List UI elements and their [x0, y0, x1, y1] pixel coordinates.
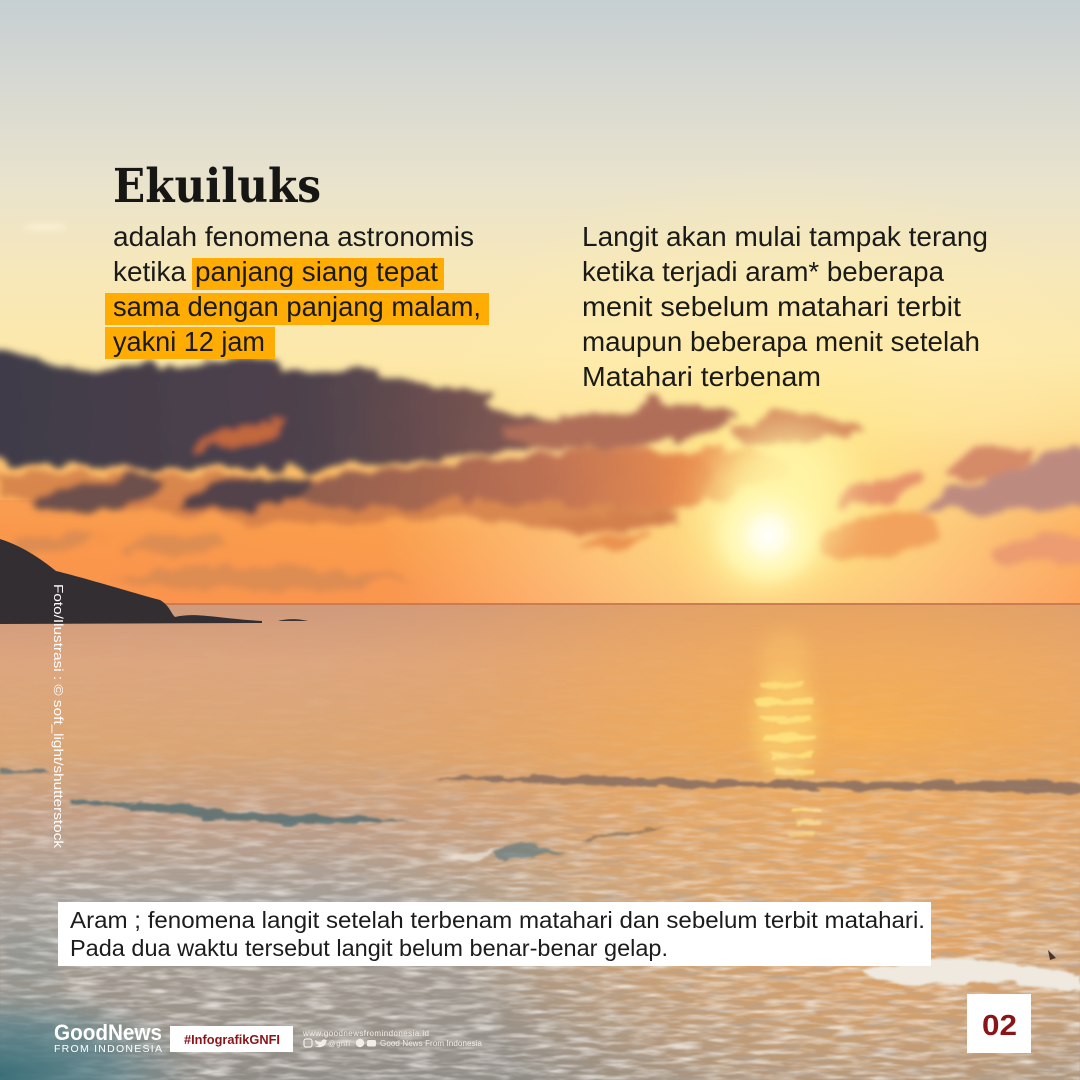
text block: definition	[113, 221, 481, 357]
text block: definition: adalah fenomena astronomis	[113, 221, 474, 252]
page number	[967, 994, 1031, 1053]
icon: twitter	[315, 1039, 327, 1047]
text block: aram explanation: maupun beberapa menit setelah	[582, 326, 980, 357]
text block: definition: ketika	[113, 256, 187, 287]
photo credit: Foto/Ilustrasi : © soft_light/shutterstock	[51, 584, 65, 849]
background photo: sun glow	[683, 407, 867, 613]
hashtag badge	[170, 1026, 293, 1052]
social links: www.goodnewsfromindonesia.id	[302, 1029, 429, 1038]
callout: aram definition	[58, 902, 931, 966]
social links: @gnfi	[328, 1039, 350, 1048]
text block: definition: yakni 12 jam	[113, 326, 265, 357]
background photo: clouds	[0, 350, 1080, 590]
background photo: sunset sky	[0, 0, 1080, 606]
text block: aram explanation: ketika terjadi aram* beberapa	[582, 256, 945, 287]
logo: GoodNews From Indonesia: FROM INDONESIA	[54, 1043, 162, 1055]
text block: aram explanation: Matahari terbenam	[582, 361, 821, 392]
icon: facebook	[356, 1039, 364, 1047]
callout: aram definition: Pada dua waktu tersebut langit belum benar-benar gelap.	[70, 935, 668, 961]
title: Ekuiluks	[113, 159, 321, 214]
text block: definition: panjang siang tepat	[195, 256, 438, 287]
callout: aram definition: Aram ; fenomena langit setelah terbenam matahari dan sebelum terbit matahari.	[70, 907, 925, 933]
text block: aram explanation: menit sebelum matahari terbit	[582, 291, 961, 322]
social links	[302, 1029, 483, 1048]
background photo: headland silhouette	[0, 539, 308, 624]
logo: GoodNews From Indonesia	[54, 1020, 162, 1055]
text block: aram explanation: Langit akan mulai tampak terang	[582, 221, 988, 252]
text block: definition: sama dengan panjang malam,	[113, 291, 481, 322]
icon: youtube	[367, 1040, 376, 1046]
background photo: sea	[0, 603, 1080, 1080]
icon: instagram	[304, 1039, 312, 1047]
social links: Good News From Indonesia	[380, 1039, 483, 1048]
hashtag badge: #InfografikGNFI	[184, 1032, 280, 1047]
text block: aram explanation	[582, 221, 988, 392]
highlight bars	[105, 258, 489, 359]
logo: GoodNews From Indonesia: GoodNews	[54, 1020, 162, 1045]
page number: 02	[982, 1010, 1017, 1042]
